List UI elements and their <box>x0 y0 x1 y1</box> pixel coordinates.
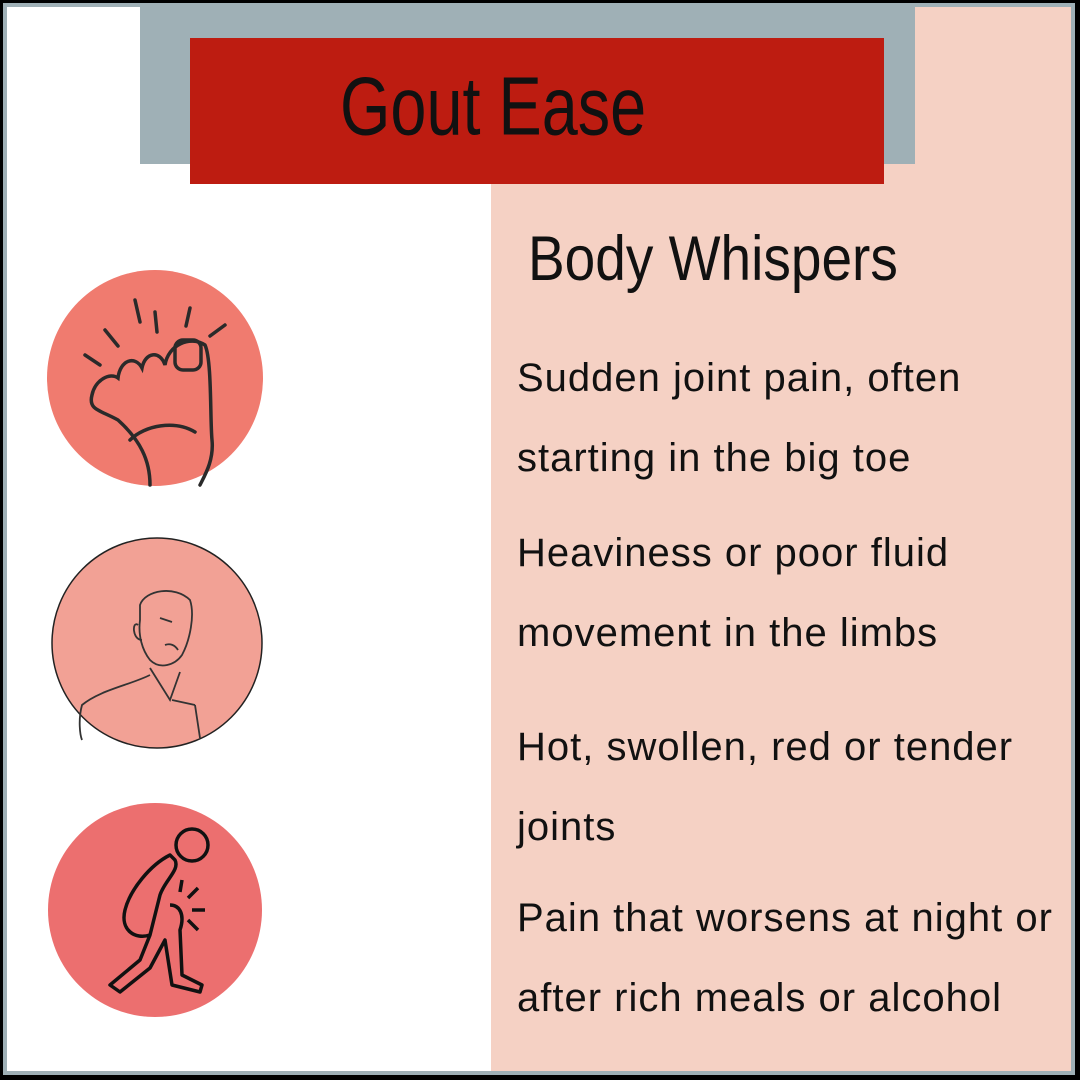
icon: tired man <box>52 538 262 748</box>
icon: foot <box>47 270 263 486</box>
icons <box>47 270 263 1017</box>
header gray band <box>140 3 915 164</box>
icon: person holding knee <box>48 803 262 1017</box>
text: symptom 4 <box>517 896 1053 1020</box>
text: symptom 1 <box>517 356 961 480</box>
text: symptom 1: Sudden joint pain, often <box>517 356 961 400</box>
text: symptom 2 <box>517 531 949 655</box>
text: symptom 3: joints <box>517 805 616 849</box>
text: symptom 1: starting in the big toe <box>517 436 911 480</box>
text: symptom 4: after rich meals or alcohol <box>517 976 1002 1020</box>
title: Gout Ease <box>340 61 646 153</box>
text: symptom 2: Heaviness or poor fluid <box>517 531 949 575</box>
title banner <box>190 38 884 184</box>
text: symptom 3: Hot, swollen, red or tender <box>517 725 1013 769</box>
text: symptom 3 <box>516 725 1013 849</box>
panel: right pink <box>491 7 1071 1071</box>
text: symptom 2: movement in the limbs <box>517 611 938 655</box>
text: symptom 4: Pain that worsens at night or <box>517 896 1053 940</box>
heading: Body Whispers: Body Whispers <box>528 222 898 294</box>
